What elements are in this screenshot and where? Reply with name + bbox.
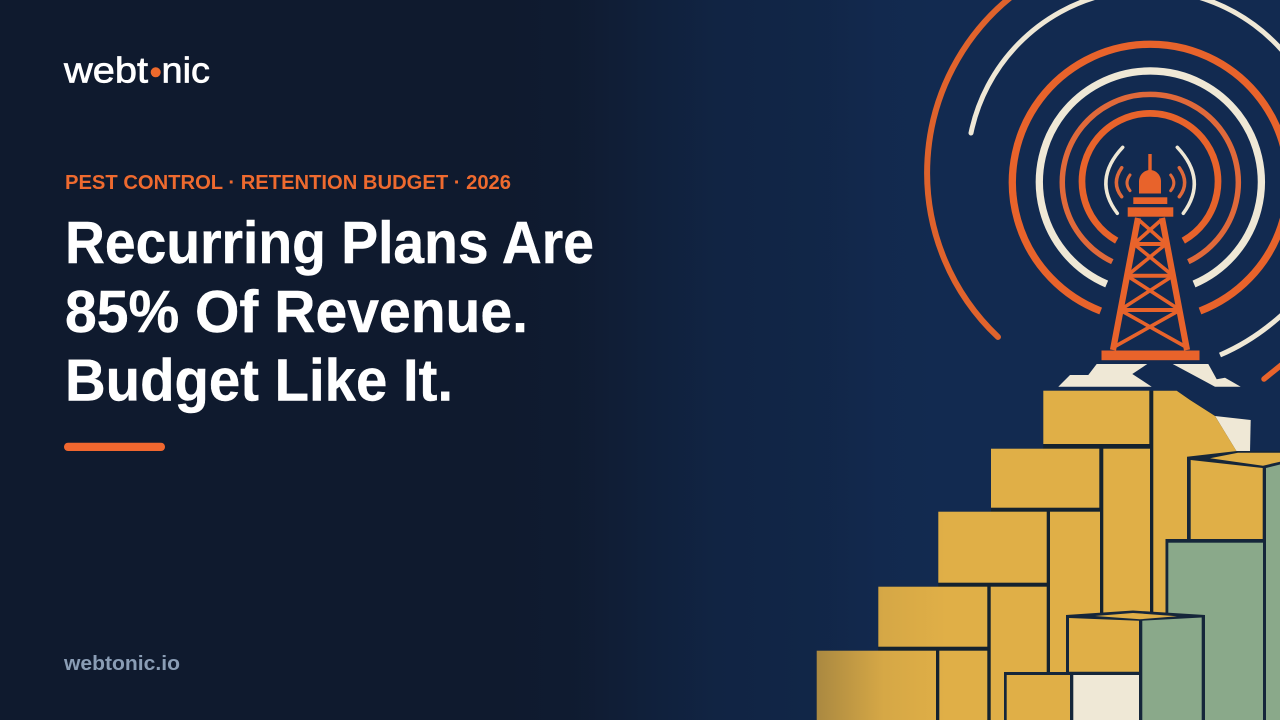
yellow stacked blocks: [817, 391, 1237, 720]
small front box: [1004, 610, 1205, 720]
tower: [1102, 154, 1200, 360]
title: Budget Like It.: [65, 348, 453, 414]
accent bar: [64, 443, 165, 451]
logo: webtonic: [63, 49, 210, 90]
eyebrow: PEST CONTROL · RETENTION BUDGET · 2026: [65, 171, 511, 194]
logo: webtonic: webt: [63, 49, 148, 90]
illustration: radio tower on stacked blocks: [817, 0, 1280, 720]
logo: webtonic: nic: [162, 49, 210, 90]
title: 85% Of Revenue.: [65, 279, 528, 345]
cream mountain patch: [1215, 416, 1251, 452]
footer url: webtonic.io: [63, 653, 180, 675]
title: [65, 210, 594, 414]
green and yellow blocks at right: [1166, 451, 1280, 720]
title: Recurring Plans Are: [65, 210, 594, 276]
signal rings: [927, 0, 1280, 379]
snow cap: [1058, 364, 1241, 387]
